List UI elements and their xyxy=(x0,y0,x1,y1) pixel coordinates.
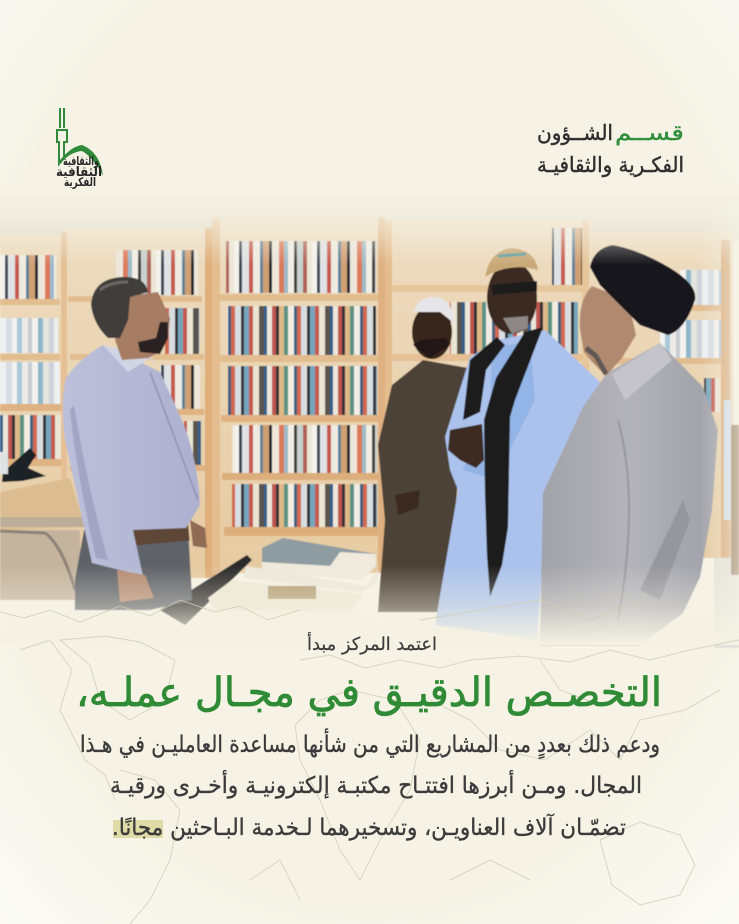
bookcase third xyxy=(212,217,386,573)
bookcase fourth xyxy=(385,220,592,580)
person: man in lavender shirt xyxy=(63,277,207,610)
text block: body paragraph xyxy=(80,728,660,841)
bookcase second xyxy=(61,228,218,578)
floor and far-right wooden post xyxy=(714,400,739,648)
bookcase left xyxy=(0,235,66,585)
bookcase right xyxy=(590,232,733,558)
heading: main green title: التخصـص الدقيـق في مجـال عملـه، xyxy=(76,670,662,716)
person: man in grey robe with black turban xyxy=(540,245,718,645)
heading: department name xyxy=(537,121,684,177)
text block: intro line: اعتمد المركز مبدأ xyxy=(307,632,437,655)
person: man in brown robe with white cap xyxy=(378,297,468,612)
text block: body paragraph: المجال. ومـن أبرزها افتتـاح مكتبـة إلكترونيـة وأخـرى ورقيـة xyxy=(110,770,642,799)
highlight behind last word xyxy=(113,820,163,838)
heading: department name: الفكـرية والثقافيـة xyxy=(537,153,684,177)
icon: logo with minaret and dome xyxy=(56,108,103,189)
heading: department name: قســم xyxy=(615,121,684,146)
heading: department name: الشــؤون xyxy=(537,121,613,145)
text block: body paragraph: تضمّـان آلاف العناويـن، وتسخيرهما لـخدمة البـاحثين مجانًا. xyxy=(112,813,626,841)
world map background xyxy=(0,600,739,924)
panel: library photo xyxy=(0,195,739,648)
book stacks on table xyxy=(160,538,378,628)
wall books behind shelves xyxy=(0,195,739,240)
icon: logo with minaret and dome: والثقافية xyxy=(63,154,99,169)
icon: logo with minaret and dome: الثقافية xyxy=(56,165,102,180)
text block: body paragraph: ودعم ذلك بعددٍ من المشاريع التي من شأنها مساعدة العامليـن في هـذا xyxy=(80,728,660,760)
desk with phone xyxy=(0,448,85,600)
fade overlays on photo xyxy=(0,183,739,645)
person: man in blue robe with black scarf xyxy=(435,248,600,640)
icon: logo with minaret and dome: الفكرية xyxy=(64,175,96,189)
